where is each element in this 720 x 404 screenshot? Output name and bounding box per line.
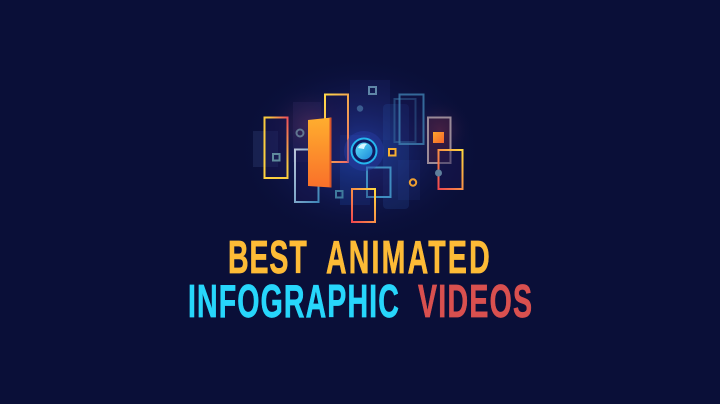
small square: lower centre xyxy=(336,191,342,198)
small squares xyxy=(273,87,444,198)
small square: inside left rectangle xyxy=(273,154,280,160)
rectangle outlines xyxy=(264,94,462,222)
background glow xyxy=(235,55,485,245)
outline: red and yellow lower rectangle xyxy=(352,189,375,222)
outline: steel blue rectangle xyxy=(295,150,318,202)
title line 1: ANIMATED xyxy=(326,232,490,284)
dot: blue top xyxy=(357,105,363,112)
title line 1 xyxy=(228,232,490,284)
small circles xyxy=(296,105,442,186)
small square: orange outlined xyxy=(389,149,396,156)
title line 2 xyxy=(188,276,532,328)
small square: top xyxy=(369,87,376,94)
ring: grey xyxy=(296,130,304,136)
orange 3D block xyxy=(308,118,332,188)
title line 2: VIDEOS xyxy=(418,276,532,328)
small square: solid orange xyxy=(433,132,444,143)
outline: yellow left rectangle xyxy=(264,118,288,178)
title line 2: INFOGRAPHIC xyxy=(188,276,399,328)
title xyxy=(188,232,532,328)
outline: yellow top rectangle xyxy=(325,94,348,162)
outline: blue lower rectangle xyxy=(367,168,390,197)
dot: grey right xyxy=(435,170,442,176)
outline: dim blue back rectangle xyxy=(394,99,416,142)
outline: red and yellow right rectangle xyxy=(438,150,462,189)
outline: grey right rectangle xyxy=(428,118,450,163)
outline: dim blue rectangle xyxy=(400,94,424,144)
ring: orange xyxy=(410,179,416,186)
title line 1: BEST xyxy=(228,232,307,284)
central lens icon xyxy=(344,131,384,171)
